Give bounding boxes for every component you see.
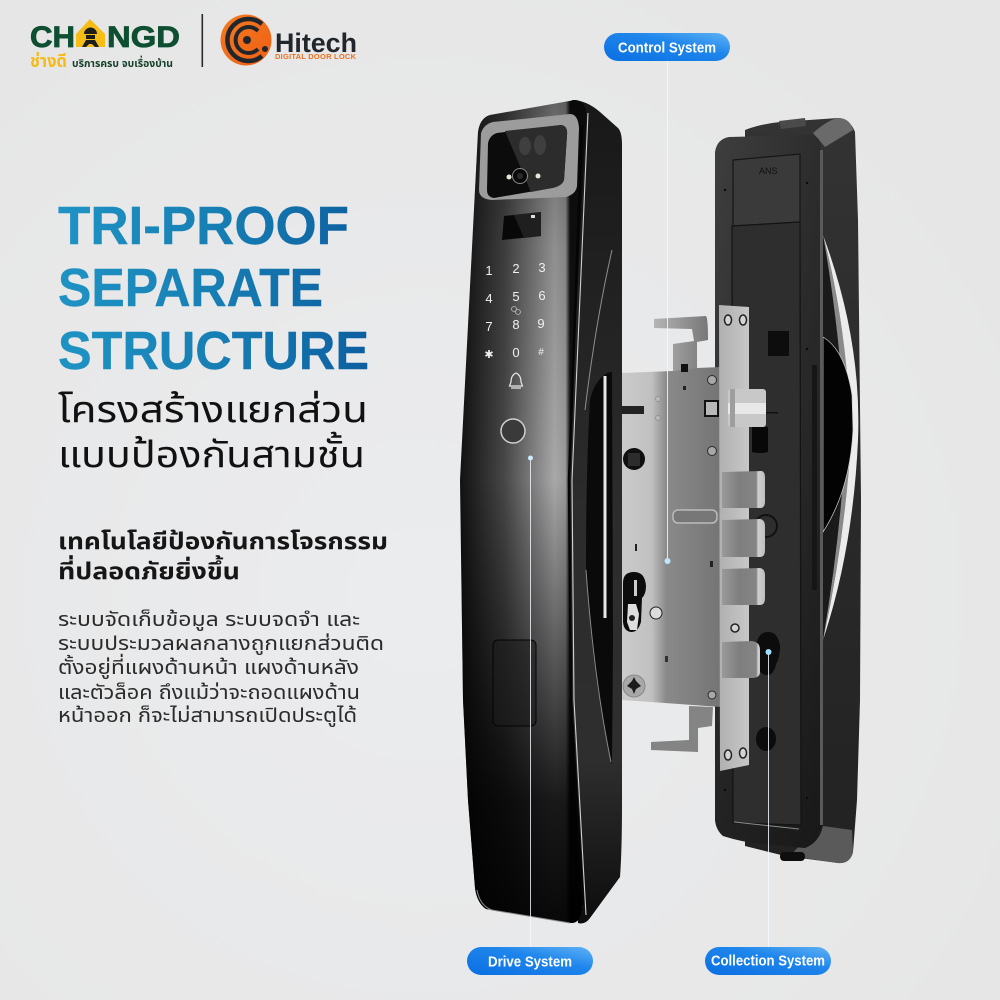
shadow on edge	[812, 365, 817, 590]
small dark slot left	[622, 406, 644, 414]
logo: Hitech	[220, 14, 357, 66]
spindle hole	[623, 448, 645, 470]
deadbolt 2	[722, 519, 765, 557]
Thai subtitle: แบบป้องกันสามชั้น	[58, 431, 365, 475]
line: drive system	[528, 456, 533, 947]
mounting tab bottom	[780, 852, 805, 861]
keyhole cut-outs	[755, 632, 780, 675]
handle cut-out	[823, 337, 853, 532]
pill label: Drive System: Drive System	[488, 954, 572, 970]
bottom bevel	[790, 826, 853, 863]
title: SEPARATE	[58, 258, 323, 318]
rectangular window behind bolts	[755, 515, 777, 537]
keypad: 5	[512, 289, 520, 304]
pill label: Collection System: Collection System	[711, 952, 825, 970]
top latch	[728, 389, 778, 453]
keypad: 2	[512, 261, 520, 276]
body paragraph: ระบบจัดเก็บข้อมูล ระบบจดจำ และ	[58, 608, 360, 632]
keypad: 9	[537, 316, 545, 331]
sub heading: เทคโนโลยีป้องกันการโจรกรรม	[58, 528, 388, 554]
icon: orange circle emblem	[220, 14, 272, 66]
tagline: บริการครบ จบเรื่องบ้าน	[72, 55, 173, 70]
keypad: ✱	[484, 349, 494, 361]
battery cover	[493, 640, 536, 726]
rivets	[635, 364, 716, 699]
body paragraph: และตัวล็อค ถึงแม้ว่าจะถอดแผงด้าน	[58, 681, 360, 704]
logo divider	[202, 14, 203, 67]
edge highlight	[820, 150, 823, 825]
title	[58, 196, 369, 381]
sensor square	[768, 331, 789, 356]
top bevel	[813, 118, 853, 147]
handle scoop	[586, 372, 613, 765]
front face	[460, 100, 586, 923]
main plate	[622, 367, 721, 707]
wordmark: Hitech: Hitech	[275, 28, 357, 58]
cylinder cut-out	[623, 572, 646, 632]
tagline: ช่างดี	[30, 51, 67, 71]
screw holes	[724, 182, 808, 799]
body paragraph	[58, 608, 384, 728]
recess top compartment	[733, 154, 800, 226]
keypad: 8	[512, 317, 520, 332]
keypad: 0	[512, 345, 520, 360]
keypad: 4	[485, 291, 493, 306]
deadbolt 3	[722, 568, 765, 605]
body paragraph: ระบบประมวลผลกลางถูกแยกส่วนติด	[58, 632, 384, 656]
slit highlight	[604, 376, 606, 618]
Thai subtitle: โครงสร้างแยกส่วน	[58, 389, 368, 430]
keypad: 6	[538, 288, 546, 303]
back panel: collection system	[715, 118, 861, 863]
deadbolt 4	[722, 641, 760, 678]
back face	[715, 135, 823, 848]
square latch opening	[705, 401, 718, 416]
connector lines	[528, 61, 772, 947]
top hook bracket	[654, 316, 708, 371]
fingerprint reader window	[502, 212, 541, 240]
body paragraph: ตั้งอยู่ที่แผงด้านหน้า แผงด้านหลัง	[58, 653, 359, 680]
wordmark: Digital Door Lock: DIGITAL DOOR LOCK	[275, 52, 357, 61]
faceplate screws	[724, 315, 746, 760]
title: TRI-PROOF	[58, 196, 349, 256]
front panel: drive system	[460, 100, 622, 923]
glossy edge seam	[572, 113, 588, 915]
logo wordmark: CHANGD: CH	[30, 21, 75, 54]
logo wordmark: CHANGD: NGD	[107, 21, 180, 54]
pill label: Control System	[604, 33, 730, 61]
faceplate strip	[719, 305, 749, 771]
mounting tab top	[779, 118, 806, 129]
logo wordmark: CHANGD	[30, 21, 180, 54]
recess lower compartment	[732, 222, 801, 825]
side curve highlight	[585, 250, 612, 410]
sub heading	[58, 528, 388, 584]
back panel body	[745, 118, 861, 863]
keypad: 1	[485, 263, 493, 278]
lock body: mortise	[622, 305, 778, 771]
body paragraph: หน้าออก ก็จะไม่สามารถเปิดประตูได้	[58, 704, 357, 728]
deadbolt 1	[722, 471, 765, 508]
camera module	[479, 114, 579, 200]
pill label: Control System: Control System	[618, 40, 716, 56]
keypad	[484, 260, 546, 361]
pill label: Collection System	[705, 947, 831, 975]
pill label: Drive System	[467, 947, 593, 975]
side body	[565, 100, 622, 923]
line: control system	[664, 61, 670, 564]
Thai subtitle	[58, 389, 368, 475]
model marking: ANS	[759, 166, 778, 176]
slot	[673, 510, 717, 523]
tagline	[30, 51, 173, 71]
line: collection system	[766, 649, 772, 947]
icon: bell	[510, 373, 522, 388]
keypad: #	[538, 347, 544, 358]
icon: yellow house with technician	[76, 19, 105, 47]
title: STRUCTURE	[58, 321, 369, 381]
fingerprint ring	[501, 419, 525, 443]
curved highlight	[823, 235, 858, 640]
bottom hook bracket	[651, 706, 713, 752]
sub heading: ที่ปลอดภัยยิ่งขึ้น	[58, 555, 240, 584]
logo: Chang D	[30, 19, 180, 71]
keypad: 3	[538, 260, 546, 275]
keypad icon: lock glyph	[512, 306, 520, 314]
keypad: 7	[485, 319, 493, 334]
cross screw	[623, 675, 645, 697]
